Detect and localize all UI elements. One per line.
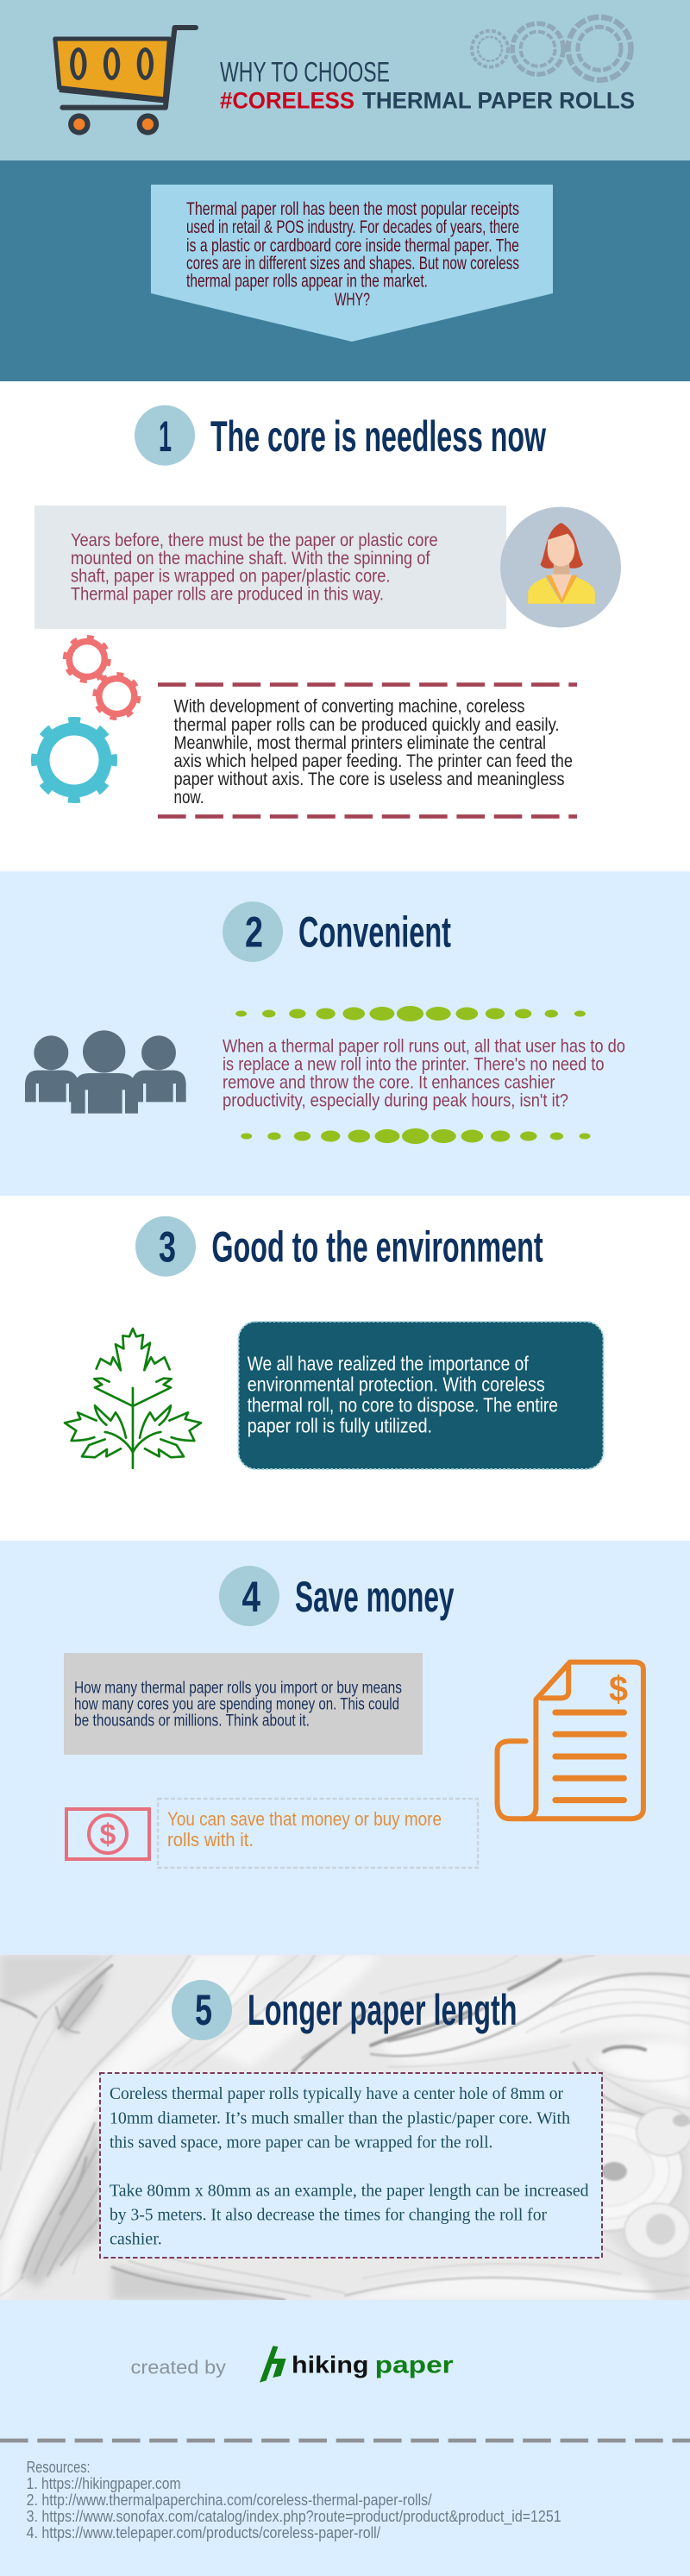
heading: section 2: Convenient — [298, 908, 451, 957]
text box: longer paper length: Take 80mm x 80mm as an example, the paper length can be increased — [110, 2181, 589, 2200]
title: THERMAL PAPER ROLLS — [362, 88, 635, 114]
text box: how many rolls: how many cores you are spending money on. This could — [74, 1695, 399, 1713]
icon: paper rolls — [472, 17, 631, 80]
panel: section 2 convenient — [0, 871, 690, 1196]
text block: development: paper without axis. The core is useless and meaningless — [174, 770, 564, 789]
heading: section 4: Save money — [295, 1573, 455, 1621]
text: resources: Resources: — [27, 2458, 91, 2476]
background: paper rolls photo — [0, 1955, 690, 2300]
icon: orange receipt — [498, 1662, 643, 1819]
title: #CORELESS — [220, 88, 354, 114]
icon: shopping cart — [55, 28, 196, 135]
heading: section 5 — [172, 1980, 518, 2040]
icon: people — [25, 1030, 186, 1114]
text box: save that money — [158, 1799, 478, 1868]
heading: section 1 — [135, 405, 546, 466]
text: introduction: used in retail & POS industry. For decades of years, there — [186, 217, 519, 237]
text: introduction: WHY? — [335, 290, 370, 310]
text box: years before — [34, 506, 506, 629]
heading: section 2 — [223, 902, 451, 962]
text: introduction — [186, 199, 519, 310]
heading: section 4 — [219, 1566, 455, 1626]
heading: section 2: 2 — [245, 908, 263, 957]
text block: development — [158, 685, 577, 816]
icon: woman avatar — [500, 507, 621, 628]
text box: longer paper length — [100, 2073, 602, 2258]
panel: header — [0, 0, 690, 160]
text block: development: thermal paper rolls can be produced quickly and easily. — [174, 715, 559, 735]
text box: longer paper length: Coreless thermal paper rolls typically have a center hole of 8mm or — [110, 2084, 563, 2103]
text: convenient: remove and throw the core. It enhances cashier — [223, 1073, 555, 1093]
text box: longer paper length: 10mm diameter. It’s much smaller than the plastic/paper core. With — [110, 2108, 570, 2127]
panel: section 5 longer paper length — [0, 1955, 690, 2300]
callout: environment text: thermal roll, no core to dispose. The entire — [248, 1393, 558, 1416]
text: introduction: thermal paper rolls appear in the market. — [186, 272, 428, 292]
logo: hiking paper — [260, 2346, 454, 2383]
panel: section 4 save money — [0, 1541, 690, 1955]
text: convenient — [223, 1036, 625, 1111]
icon: dollar bill — [66, 1809, 149, 1859]
text block: development: Meanwhile, most thermal printers eliminate the central — [174, 733, 546, 753]
text box: save that money: rolls with it. — [167, 1829, 254, 1850]
text box: save that money: You can save that money or buy more — [167, 1808, 442, 1830]
text block: development: With development of converting machine, coreless — [174, 697, 524, 717]
heading: section 1: 1 — [159, 412, 172, 461]
text: resources — [27, 2458, 561, 2541]
icon: orange receipt: $ — [609, 1668, 628, 1709]
logo: hiking paper: hiking — [292, 2352, 369, 2378]
icon: dollar bill: $ — [100, 1819, 116, 1851]
title: WHY TO CHOOSE — [220, 56, 390, 87]
text: resources: 1. https://hikingpaper.com — [27, 2474, 181, 2492]
text block: development: now. — [174, 788, 204, 807]
heading: section 5: Longer paper length — [248, 1986, 518, 2034]
text box: years before: shaft, paper is wrapped on paper/plastic core. — [71, 567, 390, 587]
text: created by: created by — [131, 2357, 226, 2378]
heading: section 5: 5 — [195, 1986, 212, 2034]
text: convenient: When a thermal paper roll runs out, all that user has to do — [223, 1036, 625, 1056]
callout: environment text: environmental protection. With coreless — [248, 1373, 545, 1395]
text: resources: 4. https://www.telepaper.com/products/coreless-paper-roll/ — [27, 2523, 381, 2541]
text box: how many rolls: How many thermal paper rolls you import or buy means — [74, 1679, 402, 1697]
text box: longer paper length: by 3-5 meters. It also decrease the times for changing the roll for — [110, 2205, 547, 2224]
panel: footer — [0, 2300, 690, 2576]
heading: section 4: 4 — [242, 1573, 260, 1621]
text box: longer paper length: cashier. — [110, 2229, 162, 2248]
text: introduction: cores are in different sizes and shapes. But now coreless — [186, 254, 519, 273]
decoration: green dots top — [235, 1006, 586, 1021]
text: convenient: is replace a new roll into the printer. There's no need to — [223, 1054, 604, 1074]
callout: environment text: We all have realized the importance of — [248, 1352, 529, 1374]
title — [220, 56, 635, 114]
text: introduction: is a plastic or cardboard core inside thermal paper. The — [186, 236, 519, 255]
callout: environment text — [238, 1322, 604, 1469]
text box: how many rolls — [64, 1653, 423, 1755]
text: resources: 3. https://www.sonofax.com/catalog/index.php?route=product/product&product_id=1251 — [27, 2507, 561, 2526]
panel: section 3 environment — [65, 1216, 604, 1469]
heading: section 3: 3 — [159, 1222, 176, 1271]
heading: section 3 — [135, 1216, 543, 1277]
text box: years before: Thermal paper rolls are produced in this way. — [71, 584, 384, 604]
text box: years before: mounted on the machine shaft. With the spinning of — [71, 549, 430, 569]
logo: hiking paper: paper — [375, 2352, 454, 2378]
text box: years before: Years before, there must be the paper or plastic core — [71, 531, 438, 550]
callout: environment text: paper roll is fully utilized. — [248, 1414, 432, 1436]
panel: section 1 the core is needless — [34, 405, 621, 816]
text: convenient: productivity, especially during peak hours, isn't it? — [223, 1091, 568, 1111]
text: introduction: Thermal paper roll has been the most popular receipts — [186, 199, 519, 219]
icon: green leaf — [65, 1329, 201, 1468]
decoration: green dots bottom — [241, 1128, 590, 1144]
text block: development: axis which helped paper feeding. The printer can feed the — [174, 751, 573, 771]
text box: how many rolls: be thousands or millions. Think about it. — [74, 1712, 310, 1730]
callout: introduction arrow — [151, 185, 553, 342]
icon: gears — [34, 637, 139, 801]
text box: longer paper length: this saved space, more paper can be wrapped for the roll. — [110, 2133, 492, 2152]
panel: introduction band — [0, 160, 690, 381]
text: resources: 2. http://www.thermalpaperchina.com/coreless-thermal-paper-rolls/ — [27, 2491, 432, 2509]
